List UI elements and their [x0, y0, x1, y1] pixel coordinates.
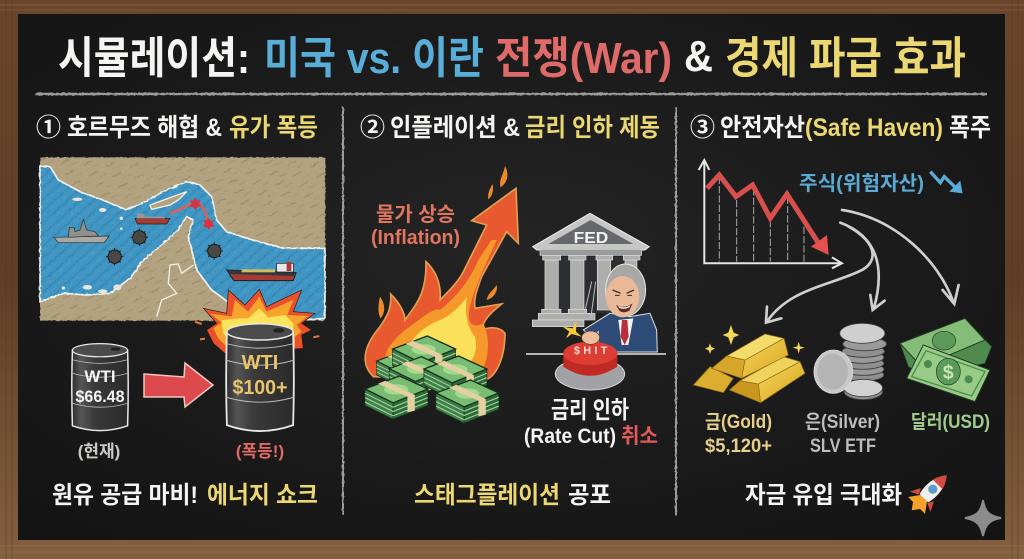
- barrel current: [71, 344, 129, 431]
- label rate cut: [524, 397, 658, 448]
- barrel spike: [225, 324, 295, 431]
- label spike: (폭등!): [236, 442, 284, 461]
- heading 3: (Safe Haven): [805, 114, 943, 142]
- dollar bills: [900, 318, 992, 402]
- title: 경제 파급 효과: [725, 34, 966, 83]
- tanker in strait: [135, 213, 170, 224]
- flame arrow with burning cash: [365, 166, 666, 423]
- islands: [62, 198, 123, 293]
- stock down arrow: [930, 172, 963, 193]
- barrel spike: $100+: [232, 377, 288, 399]
- label rate cut: (Rate Cut): [524, 425, 616, 448]
- heading 3: ③: [690, 114, 715, 142]
- barrel current: WTI: [84, 367, 116, 386]
- heading 1: [36, 114, 318, 142]
- warship: [54, 219, 109, 243]
- title: 시뮬레이션:: [58, 34, 250, 83]
- panel: inflation and rate cut: [360, 114, 666, 509]
- red button: [555, 331, 625, 390]
- barrel spike: WTI: [242, 352, 278, 374]
- heading 1: 유가 폭등: [229, 114, 318, 142]
- label current: (현재): [78, 442, 120, 461]
- panel: safe havens: [690, 114, 992, 520]
- heading 3: [690, 114, 991, 142]
- dollar bills: $: [943, 363, 954, 384]
- label gold: [705, 412, 772, 457]
- heading 1: 호르무즈 해협 &: [67, 114, 222, 142]
- label inflation: (Inflation): [371, 227, 460, 249]
- label inflation: [371, 203, 460, 249]
- takeaway 3: 자금 유입 극대화: [745, 482, 902, 509]
- red button: $HIT: [574, 345, 608, 357]
- Fed building: [532, 213, 649, 327]
- heading 2: ②: [360, 114, 385, 142]
- heading 2: 금리 인하 제동: [525, 114, 660, 142]
- barrel current: $66.48: [76, 387, 124, 406]
- Fed building: FED: [574, 230, 608, 247]
- divider lines: [35, 94, 987, 515]
- heading 1: ①: [36, 114, 61, 142]
- heading 3: 안전자산: [720, 114, 805, 142]
- title: &: [684, 32, 713, 81]
- heading 2: [360, 114, 660, 142]
- panel: Hormuz and oil: [36, 114, 325, 509]
- takeaway 2: 스태그플레이션: [414, 482, 560, 509]
- gold bars: [693, 325, 805, 403]
- takeaway 1: 원유 공급 마비!: [52, 482, 198, 509]
- arrow red: [144, 363, 213, 407]
- label gold: 금(Gold): [705, 412, 772, 433]
- takeaway 1: 에너지 쇼크: [207, 482, 318, 509]
- table line: [526, 351, 666, 356]
- label gold: $5,120+: [705, 436, 772, 457]
- label inflation: 물가 상승: [376, 203, 455, 226]
- title: [58, 32, 966, 83]
- title: 전쟁(War): [495, 34, 672, 83]
- stacks of cash: [365, 336, 499, 423]
- border line: [157, 264, 193, 317]
- map of strait of Hormuz: [40, 157, 325, 321]
- sea mines: [106, 229, 223, 265]
- label dollar: 달러(USD): [911, 411, 990, 433]
- stock crash chart: [699, 160, 842, 268]
- watermark star: [965, 500, 1001, 536]
- label silver: SLV ETF: [810, 436, 876, 457]
- cargo ship: [227, 262, 296, 281]
- takeaway 1: [52, 482, 318, 509]
- silver coins: [814, 323, 887, 400]
- title: 미국 vs. 이란: [264, 34, 484, 83]
- label silver: 은(Silver): [805, 412, 880, 433]
- flow arrows to assets: [766, 210, 959, 323]
- icon: rocket: [902, 465, 957, 520]
- label rate cut: 취소: [621, 425, 658, 448]
- heading 2: 인플레이션 &: [390, 114, 520, 142]
- Fed chair figure: [563, 264, 657, 352]
- takeaway 2: 공포: [568, 482, 611, 509]
- label silver: [805, 412, 880, 457]
- attack arrow and blasts: [170, 198, 215, 230]
- flame arrow: [365, 166, 518, 380]
- Qeshm island: [150, 192, 187, 209]
- explosion burst: [195, 289, 319, 355]
- heading 3: 폭주: [949, 114, 991, 142]
- stock label: 주식(위험자산): [799, 172, 924, 195]
- label rate cut: 금리 인하: [551, 397, 629, 424]
